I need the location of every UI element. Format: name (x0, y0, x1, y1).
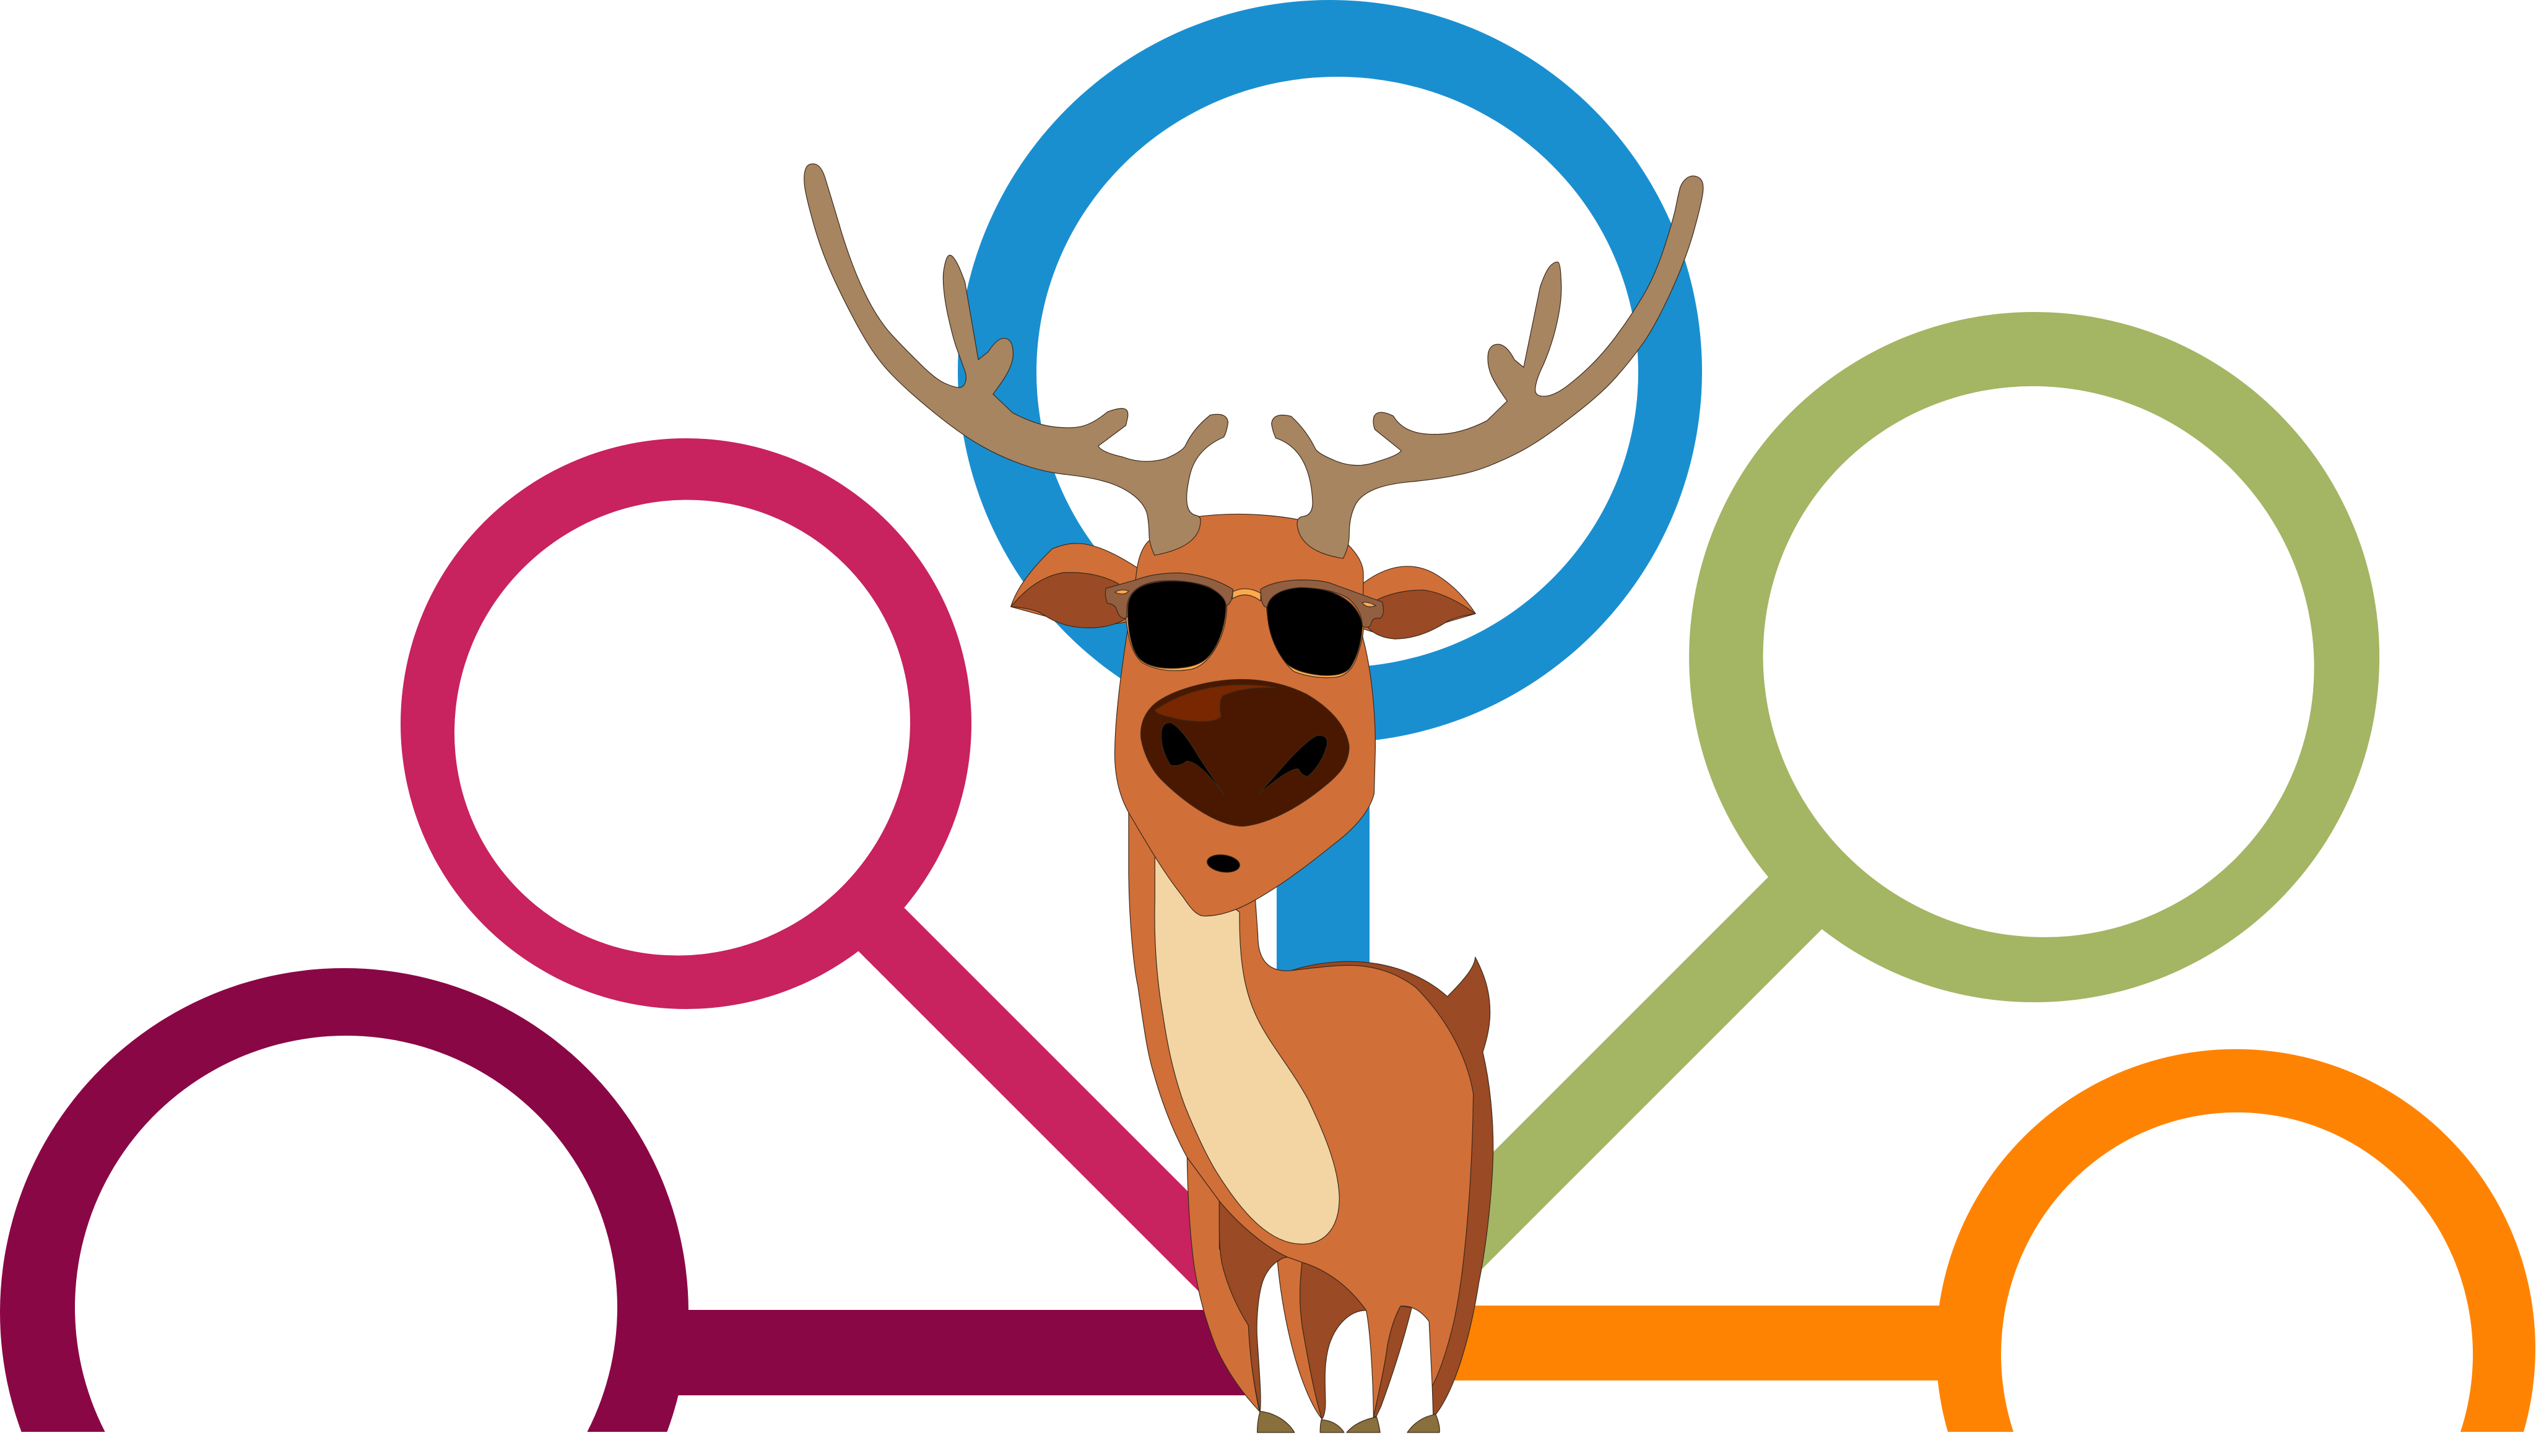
rump and tail (1291, 957, 1493, 1415)
front left leg (1187, 1158, 1259, 1411)
magnifier: green (1472, 272, 2428, 1279)
deer head (1011, 514, 1475, 916)
magnifier: blue (958, 0, 1702, 975)
antlers (804, 164, 1703, 558)
left ear (1011, 544, 1137, 628)
left antler (804, 164, 1228, 555)
front left leg shadow (1219, 1201, 1288, 1411)
head shape (1114, 514, 1375, 916)
deer (804, 164, 1703, 1432)
hooves (1257, 1411, 1440, 1432)
magnifier: orange (1444, 1049, 2535, 1432)
magnifier: pink (360, 405, 1210, 1303)
chin spot (1206, 853, 1241, 874)
middle leg (1277, 1257, 1322, 1419)
right antler (1272, 176, 1703, 558)
nose (1140, 679, 1349, 826)
middle leg shadow (1300, 1262, 1366, 1419)
sunglasses (1105, 573, 1383, 678)
magnifier: maroon (0, 968, 1250, 1432)
deer body and legs (1129, 811, 1493, 1432)
cream chest (1155, 851, 1339, 1244)
rear leg shadow (1373, 1306, 1412, 1417)
right ear (1360, 566, 1475, 639)
torso and neck (1129, 811, 1474, 1417)
